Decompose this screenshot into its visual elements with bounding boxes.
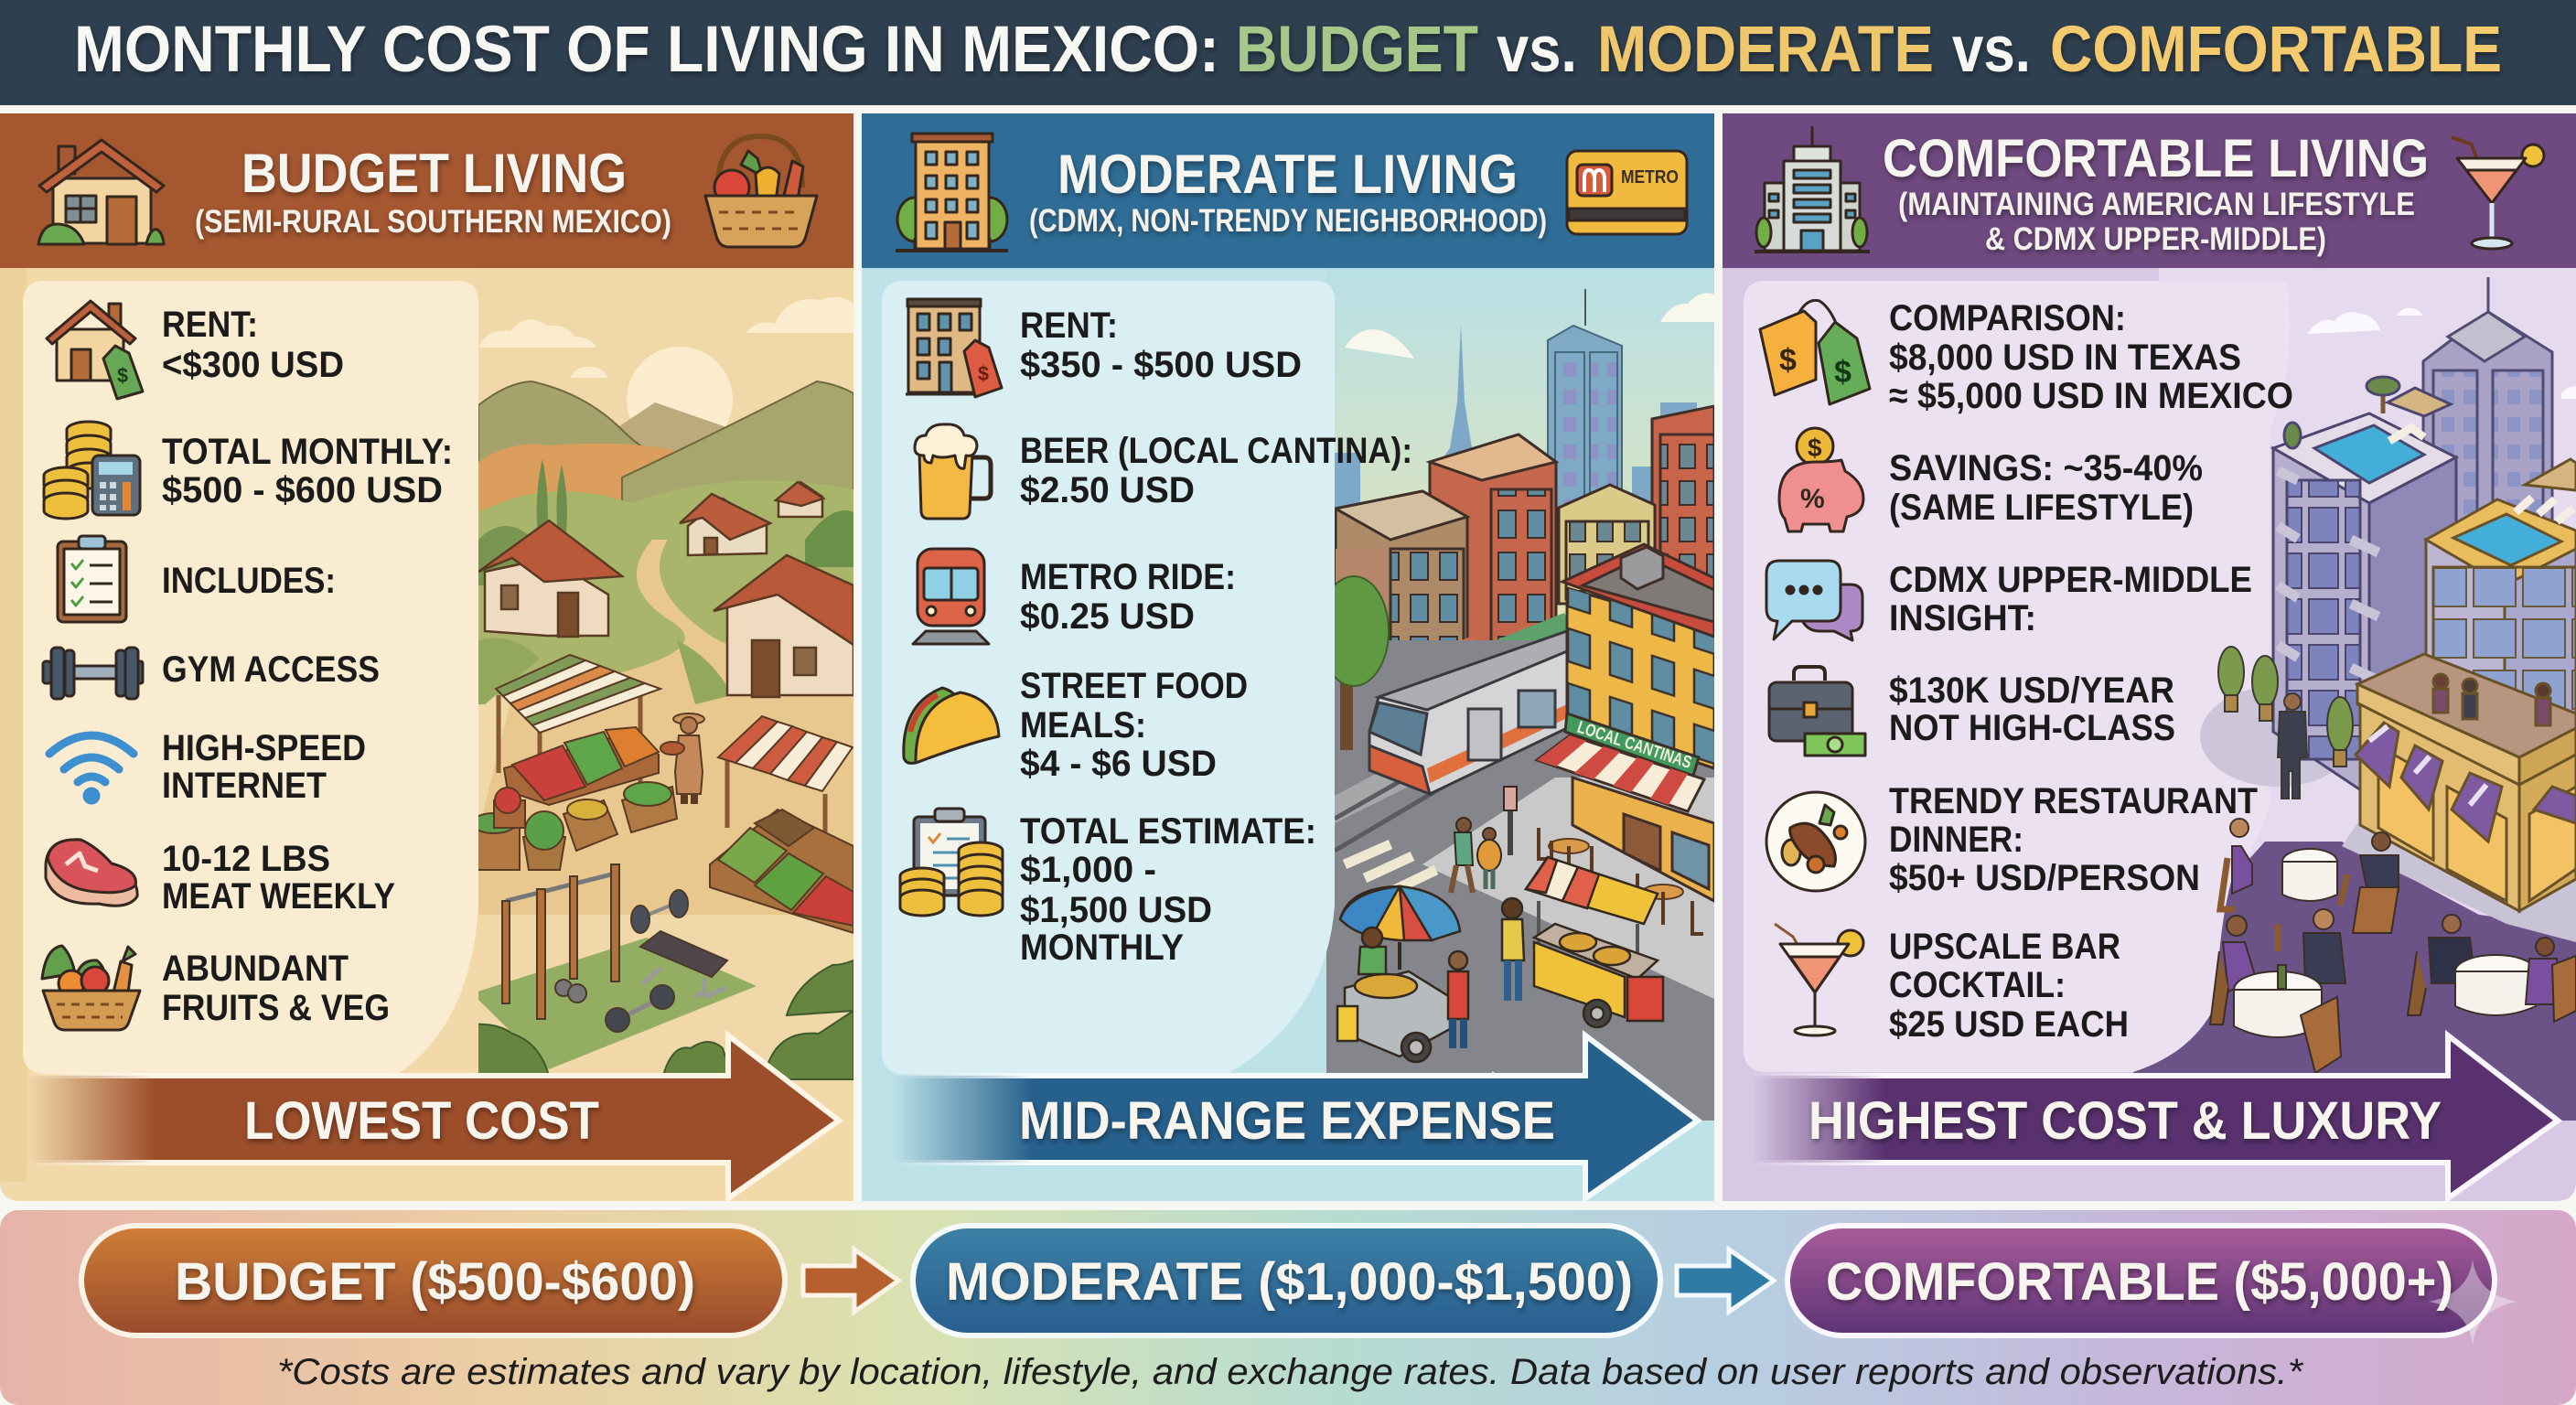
panel header: budget living	[0, 113, 853, 268]
illustration: village, market and gym	[478, 296, 853, 1080]
title: MONTHLY COST OF LIVING IN MEXICO:	[74, 14, 1219, 86]
arrow: lowest cost: LOWEST COST	[244, 1091, 599, 1151]
arrow: moderate to comfortable	[1677, 1249, 1774, 1312]
icon: office tower	[1755, 126, 1870, 252]
pool tower	[2273, 377, 2456, 796]
item: beer: BEER (LOCAL CANTINA):	[1020, 431, 1412, 471]
metro train	[1369, 631, 1567, 794]
market stall 1	[468, 655, 677, 870]
text card: budget	[23, 281, 478, 1074]
title: vs.	[1497, 14, 1577, 86]
arrow: highest cost and luxury	[1745, 1035, 2558, 1198]
item: internet: INTERNET	[162, 766, 327, 806]
arrow: highest cost and luxury: HIGHEST COST & LUXURY	[1809, 1091, 2442, 1151]
icon: train	[913, 549, 989, 644]
item: savings: SAVINGS: ~35-40%	[1889, 448, 2203, 488]
icon: price tags: $	[1834, 355, 1852, 390]
panel: moderate living	[862, 113, 1714, 1201]
plaza people and topiaries	[2218, 647, 2353, 799]
icon: speech bubbles	[1766, 561, 1862, 640]
icon: price tags	[1760, 300, 1870, 404]
item: total estimate: $1,500 USD	[1020, 890, 1212, 930]
title: MODERATE	[1597, 14, 1934, 86]
title	[74, 14, 2502, 86]
item: bar cocktail: $25 USD EACH	[1889, 1004, 2129, 1045]
item: restaurant: $50+ USD/PERSON	[1889, 858, 2200, 898]
icon: apartment building	[896, 134, 1008, 251]
item: rent: RENT:	[1020, 306, 1118, 346]
yellow cantina building: LOCAL CANTINAS	[1574, 718, 1694, 773]
item: rent: <$300 USD	[162, 345, 344, 385]
item: insight: CDMX UPPER-MIDDLE	[1889, 560, 2252, 600]
item: gym access	[43, 648, 380, 699]
subheading: (MAINTAINING AMERICAN LIFESTYLE	[1898, 187, 2415, 222]
icon: building with tag	[906, 299, 1002, 397]
item: internet	[49, 728, 366, 806]
icon: dinner plate	[1766, 792, 1865, 891]
pill: moderate	[913, 1226, 1660, 1335]
item: beer: $2.50 USD	[1020, 470, 1195, 510]
icon: piggy bank: %	[1800, 484, 1825, 514]
city buildings	[1335, 404, 1714, 640]
item: metro ride	[913, 549, 1236, 644]
icon: piggy bank: $	[1808, 434, 1822, 462]
pill: comfortable: COMFORTABLE ($5,000+)	[1826, 1252, 2453, 1312]
heading: COMFORTABLE LIVING	[1883, 129, 2429, 188]
houses	[478, 482, 853, 697]
icon: dumbbell	[43, 648, 143, 699]
header banner	[0, 0, 2576, 105]
pill: moderate: MODERATE ($1,000-$1,500)	[946, 1252, 1633, 1312]
item: bar cocktail: COCKTAIL:	[1889, 965, 2066, 1005]
item: produce: FRUITS & VEG	[162, 988, 390, 1028]
icon: building with tag: $	[978, 362, 989, 385]
item: internet: HIGH-SPEED	[162, 728, 366, 768]
outdoor gym	[472, 864, 757, 1069]
panel: comfortable living	[1723, 113, 2576, 1201]
panel header: comfortable living	[1723, 113, 2576, 268]
pill: comfortable	[1787, 1226, 2495, 1335]
item: bar cocktail: UPSCALE BAR	[1889, 927, 2120, 967]
footnote: *Costs are estimates and vary by location, lifestyle, and exchange rates. Data based on user reports and observations.*	[277, 1352, 2303, 1392]
item: rent	[906, 299, 1302, 397]
item: savings	[1779, 428, 2203, 531]
market stall 2	[710, 716, 853, 933]
icon: food basket	[705, 136, 817, 247]
food cart	[1502, 857, 1663, 1027]
icon: cocktail	[1775, 924, 1863, 1035]
gold restaurant tower	[2356, 459, 2576, 911]
icon: metro card: METRO	[1621, 167, 1679, 188]
icon: house	[38, 140, 164, 244]
panel: budget living	[0, 113, 853, 1201]
bottom summary strip	[0, 1210, 2576, 1405]
subheading	[1898, 187, 2415, 257]
pill: budget: BUDGET ($500-$600)	[175, 1252, 695, 1312]
arrow: lowest cost	[23, 1035, 839, 1198]
icon: cocktail	[2452, 137, 2544, 249]
item: total monthly: TOTAL MONTHLY:	[162, 432, 453, 472]
item: meat: 10-12 LBS	[162, 839, 330, 879]
item: insight: INSIGHT:	[1889, 598, 2036, 638]
title: vs.	[1952, 14, 2031, 86]
subheading: & CDMX UPPER-MIDDLE)	[1985, 221, 2326, 257]
icon: checklist	[58, 536, 126, 622]
item: comparison: COMPARISON:	[1889, 298, 2126, 338]
icon: house with tag	[47, 301, 143, 399]
icon: house with tag: $	[117, 364, 128, 387]
item: rent	[47, 301, 344, 399]
item: rent: $350 - $500 USD	[1020, 345, 1302, 385]
icon: price tags: $	[1779, 343, 1797, 378]
item: total estimate: $1,000 -	[1020, 850, 1156, 890]
item: total monthly: $500 - $600 USD	[162, 470, 443, 510]
taco vendor umbrella and cart	[1337, 886, 1468, 1062]
pedestrians	[1451, 787, 1517, 893]
heading: BUDGET LIVING	[242, 143, 627, 204]
item: comparison: ≈ $5,000 USD IN MEXICO	[1889, 376, 2293, 416]
text card: comfortable	[1744, 281, 2293, 1072]
item: street food: STREET FOOD	[1020, 666, 1248, 706]
text card: moderate	[882, 281, 1412, 1074]
item: metro ride: $0.25 USD	[1020, 596, 1195, 637]
cafe tables	[1539, 828, 1703, 934]
heading: MODERATE LIVING	[1057, 144, 1518, 205]
icon: taco	[904, 688, 999, 763]
title: COMFORTABLE	[2050, 14, 2502, 86]
street	[1326, 640, 1714, 1121]
arrow: mid-range expense	[886, 1035, 1698, 1198]
arrow: mid-range expense: MID-RANGE EXPENSE	[1019, 1091, 1555, 1151]
item: total estimate	[900, 809, 1316, 968]
icon: beer mug	[915, 424, 991, 519]
illustration: luxury rooftop towers and patio dining	[2133, 277, 2576, 1121]
item: street food	[904, 666, 1248, 784]
item: meat	[46, 839, 395, 917]
item: includes	[58, 536, 336, 622]
illustration: city street with train and vendors	[1319, 268, 1714, 1121]
item: restaurant: TRENDY RESTAURANT	[1889, 781, 2258, 821]
subheading: (SEMI-RURAL SOUTHERN MEXICO)	[195, 204, 671, 240]
icon: vegetable basket	[42, 946, 140, 1030]
icon: steak	[46, 840, 137, 906]
item: beer	[915, 424, 1412, 519]
item: gym access: GYM ACCESS	[162, 649, 380, 690]
title: BUDGET	[1236, 14, 1478, 86]
item: comparison: $8,000 USD IN TEXAS	[1889, 338, 2241, 378]
item: total monthly	[44, 422, 453, 519]
item: bar cocktail	[1775, 924, 2129, 1045]
item: restaurant	[1766, 781, 2258, 898]
item: comparison	[1760, 298, 2293, 416]
item: insight	[1766, 560, 2252, 640]
item: income: $130K USD/YEAR	[1889, 670, 2174, 711]
item: includes: INCLUDES:	[162, 561, 336, 601]
icon: metro card	[1567, 151, 1687, 234]
item: savings: (SAME LIFESTYLE)	[1889, 488, 2194, 528]
back tower	[2422, 277, 2554, 520]
item: restaurant: DINNER:	[1889, 820, 2023, 860]
item: income	[1769, 667, 2175, 756]
item: street food: $4 - $6 USD	[1020, 744, 1217, 784]
icon: clipboard and coins	[900, 809, 1003, 916]
item: meat: MEAT WEEKLY	[162, 876, 395, 917]
pill: budget	[81, 1226, 785, 1335]
arrow: budget to moderate	[803, 1249, 898, 1312]
bushes	[478, 959, 853, 1080]
icon: wifi	[49, 735, 134, 800]
item: income: NOT HIGH-CLASS	[1889, 708, 2175, 748]
item: rent: RENT:	[162, 305, 258, 345]
icon: piggy bank	[1779, 428, 1863, 531]
item: street food: MEALS:	[1020, 705, 1146, 745]
panel header: moderate living	[862, 113, 1714, 268]
patio tables	[2210, 819, 2576, 1073]
tree	[1335, 575, 1390, 750]
item: metro ride: METRO RIDE:	[1020, 557, 1236, 597]
subheading: (CDMX, NON-TRENDY NEIGHBORHOOD)	[1029, 203, 1547, 239]
item: produce	[42, 946, 390, 1030]
skyline	[1335, 326, 1697, 507]
item: total estimate: TOTAL ESTIMATE:	[1020, 811, 1316, 852]
icon: briefcase with cash	[1769, 667, 1865, 756]
sparkle mark	[2429, 1260, 2517, 1345]
vendor woman	[660, 713, 704, 803]
item: total estimate: MONTHLY	[1020, 928, 1184, 968]
yellow cantina building	[1537, 544, 1714, 901]
item: produce: ABUNDANT	[162, 949, 349, 989]
icon: coins and calculator	[44, 422, 140, 519]
